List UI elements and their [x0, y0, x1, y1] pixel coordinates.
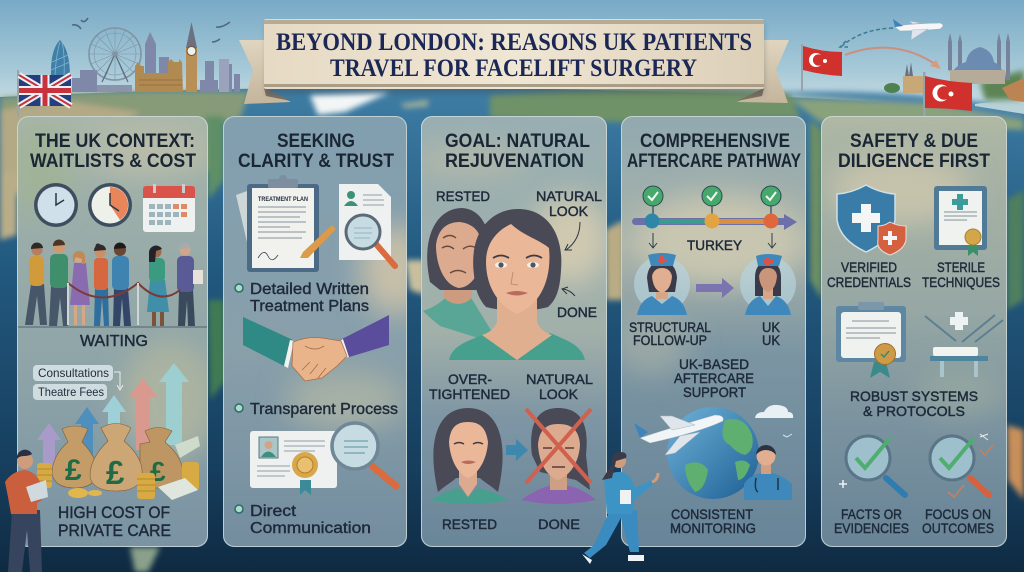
icon: clock two — [88, 183, 132, 227]
icon: sterile instruments and table — [925, 312, 1003, 377]
bag centre: £ — [106, 454, 125, 491]
older face — [423, 208, 500, 345]
icon: airplane — [893, 19, 943, 40]
label: sterile techniques: STERILE — [937, 259, 985, 275]
money bags — [52, 424, 183, 491]
heading: REJUVENATION — [445, 151, 584, 172]
icon: handshake — [243, 315, 389, 381]
panel: UK context — [10, 116, 220, 547]
route arrows and plane — [840, 19, 943, 69]
heading — [627, 131, 801, 172]
label: high cost: HIGH COST OF — [58, 503, 170, 522]
panel: aftercare pathway — [610, 116, 806, 547]
heading: GOAL: NATURAL — [445, 131, 590, 152]
bullet: detailed plans: Treatment Plans — [250, 298, 369, 315]
icon: Turkish flag front — [923, 72, 972, 117]
icon: ferris wheel — [89, 28, 141, 82]
label: over-tightened: OVER- — [448, 371, 492, 387]
label: UK-based aftercare support: UK-BASED — [679, 356, 749, 372]
icon: doctor — [744, 445, 792, 500]
node one — [643, 186, 663, 228]
label: verified credentials: CREDENTIALS — [827, 274, 911, 290]
background: sky — [0, 0, 1024, 120]
label: natural look lower — [526, 371, 593, 402]
label: UK: UK — [762, 332, 781, 348]
heading: CLARITY & TRUST — [238, 151, 394, 172]
shore buildings — [903, 76, 925, 93]
small pointer arrow — [114, 372, 123, 390]
icon: sterile certificate — [934, 186, 987, 256]
label: verified credentials: VERIFIED — [841, 259, 897, 275]
front face — [449, 209, 585, 360]
label: facts or evidencies: FACTS OR — [841, 506, 902, 522]
label: UK-based aftercare support: SUPPORT — [683, 384, 746, 400]
label: consistent monitoring: CONSISTENT — [671, 506, 753, 522]
icon: big ben — [186, 22, 197, 92]
heading: COMPREHENSIVE — [640, 131, 790, 152]
label: focus on outcomes — [922, 506, 994, 536]
icon: credential card — [250, 423, 396, 495]
label: turkey: TURKEY — [687, 237, 743, 253]
nurse left — [634, 253, 690, 315]
icon: bird — [783, 434, 792, 437]
label: focus on outcomes: FOCUS ON — [925, 506, 991, 522]
icon: parliament — [135, 59, 183, 92]
icon: airplane large — [634, 415, 723, 455]
shore and cliffs — [975, 102, 1024, 114]
panel: safety and due diligence — [821, 116, 1007, 547]
label: sterile techniques — [922, 259, 1000, 290]
label: consistent monitoring: MONITORING — [670, 520, 756, 536]
coins and cash — [37, 436, 200, 500]
arrow purple — [696, 278, 734, 298]
bullet: direct communication: Direct — [250, 503, 297, 520]
label: robust systems — [850, 388, 978, 419]
icon: birds — [72, 18, 230, 42]
bullet: detailed plans — [235, 281, 369, 315]
node three — [761, 186, 781, 228]
node two — [702, 186, 722, 228]
person 2 — [49, 239, 68, 326]
person 3 — [70, 251, 90, 325]
banner shadow — [266, 24, 764, 94]
label: structural follow-up: STRUCTURAL — [629, 319, 711, 335]
label: waiting: WAITING — [80, 333, 148, 350]
label: natural look top: LOOK — [549, 203, 589, 219]
label: rested top: RESTED — [436, 188, 490, 204]
label: focus on outcomes: OUTCOMES — [922, 520, 994, 536]
label: high cost: PRIVATE CARE — [58, 521, 171, 540]
person 1 — [25, 242, 47, 325]
trees — [884, 83, 900, 93]
tag: theatre fees: Theatre Fees — [38, 385, 104, 399]
timeline — [632, 186, 797, 248]
icon: Turkish flag rear — [801, 44, 842, 92]
solid route arrow — [845, 48, 938, 66]
label: facts or evidencies — [834, 506, 909, 536]
skyline: London landmarks — [51, 18, 240, 92]
label: over-tightened: TIGHTENED — [429, 386, 510, 402]
rising cost arrows — [37, 363, 189, 470]
pointer arrow — [565, 222, 580, 250]
heading — [445, 131, 590, 172]
label: robust systems: & PROTOCOLS — [863, 403, 965, 419]
label: done lower: DONE — [538, 516, 580, 532]
icon: calendar — [143, 184, 195, 232]
label: UK-based aftercare support — [674, 356, 754, 400]
heading — [838, 131, 990, 172]
heading: SEEKING — [277, 131, 355, 152]
heading: DILIGENCE FIRST — [838, 151, 990, 172]
person 4 — [94, 244, 109, 326]
rope barrier — [68, 283, 180, 325]
label: natural look top — [536, 188, 602, 219]
face rested lower — [430, 408, 508, 504]
heading: WAITLISTS & COST — [30, 151, 196, 172]
face over-tightened lower — [521, 408, 596, 504]
label: rested lower: RESTED — [442, 516, 497, 532]
icon: treatment plan clipboard — [236, 175, 336, 272]
title text: BEYOND LONDON: REASONS UK PATIENTS — [276, 27, 752, 56]
pointer arrow — [562, 287, 575, 296]
label: robust systems: ROBUST SYSTEMS — [850, 388, 978, 404]
heading: AFTERCARE PATHWAY — [627, 151, 801, 172]
icon: magnifier check blue — [839, 436, 905, 495]
Istanbul skyline — [884, 33, 1024, 114]
label: natural look top: NATURAL — [536, 188, 602, 204]
figure: man with tablet — [5, 450, 48, 572]
label: natural look lower: LOOK — [539, 386, 579, 402]
label: done top: DONE — [557, 304, 597, 320]
label: sterile techniques: TECHNIQUES — [922, 274, 1000, 290]
label: natural look lower: NATURAL — [526, 371, 593, 387]
icon: clock one — [34, 183, 78, 227]
label: structural follow-up — [629, 319, 711, 348]
person 6 — [147, 246, 169, 326]
left ribbon tail — [239, 40, 291, 104]
ribbon folds — [264, 88, 764, 101]
icon: shield — [837, 185, 906, 255]
label: UK: UK — [762, 319, 781, 335]
heading — [238, 131, 394, 172]
figure: walking nurse — [582, 452, 658, 564]
label: facts or evidencies: EVIDENCIES — [834, 520, 909, 536]
icon: mosque — [948, 33, 1010, 84]
heading — [30, 131, 196, 172]
right ribbon tail — [737, 40, 789, 103]
bag right: £ — [150, 456, 166, 487]
heading: SAFETY & DUE — [850, 131, 978, 152]
banner body — [264, 19, 764, 89]
icon: treatment plan clipboard: TREATMENT PLAN — [258, 196, 308, 203]
bag left: £ — [65, 454, 82, 487]
nurse right — [740, 254, 796, 315]
panel: seeking clarity and trust — [223, 116, 407, 547]
label: structural follow-up: FOLLOW-UP — [633, 332, 707, 348]
city buildings — [72, 32, 240, 92]
dashed route arrow — [840, 28, 893, 47]
arrow blue — [506, 439, 528, 461]
person 7 — [177, 242, 203, 326]
arrow head — [930, 60, 941, 69]
queue of people — [18, 239, 207, 327]
person 5 — [112, 242, 131, 326]
title text: TRAVEL FOR FACELIFT SURGERY — [330, 53, 697, 82]
icon: UK flag — [17, 70, 71, 117]
bullet: direct communication — [235, 503, 371, 537]
icon: document with magnifier — [339, 184, 395, 266]
label: UK-based aftercare support: AFTERCARE — [674, 370, 754, 386]
title text — [276, 27, 752, 82]
panel: natural rejuvenation — [410, 116, 610, 547]
bullet: transparent process: Transparent Process — [250, 401, 398, 418]
label: verified credentials — [827, 259, 911, 290]
bullet: direct communication: Communication — [250, 520, 371, 537]
title banner — [239, 19, 789, 104]
label: high cost — [58, 503, 171, 540]
red cross — [526, 409, 591, 483]
bullet: detailed plans: Detailed Written — [250, 281, 369, 298]
heading: THE UK CONTEXT: — [35, 131, 195, 152]
tag: consultations: Consultations — [38, 366, 109, 380]
label: consistent monitoring — [670, 506, 756, 536]
icon: magnifier check orange — [930, 434, 993, 497]
icon: globe — [667, 407, 759, 499]
label: UK — [762, 319, 781, 348]
icon: clipboard certificate — [836, 302, 906, 378]
icon: cloud — [755, 405, 793, 418]
label: over-tightened — [429, 371, 510, 402]
icon: gherkin tower — [51, 40, 70, 77]
